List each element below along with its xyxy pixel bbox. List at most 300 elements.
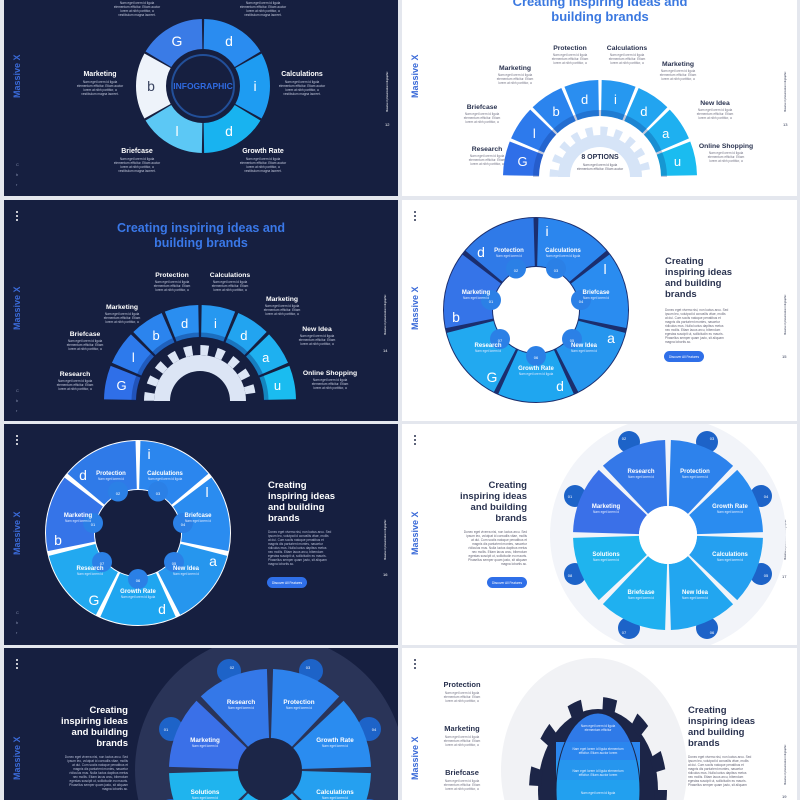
wheel chart: l (205, 484, 209, 500)
heading: and building (665, 278, 722, 289)
side letters: r (16, 630, 18, 635)
paragraph: Phasellus semper quam justo, sit aliquam (688, 783, 747, 787)
paragraph: Phasellus semper quam justo, sit aliquam (468, 558, 527, 562)
labels: elementum efficitur. Etiam (312, 382, 349, 386)
gear chart: Nam eget lorem id ligula (581, 724, 615, 728)
labels: Marketing (106, 304, 138, 311)
heading: Creating (89, 705, 128, 716)
heading: inspiring ideas (268, 491, 335, 502)
wheel chart: Nam eget lorem id (583, 296, 609, 300)
labels: vestibulum magna laoreet. (244, 13, 282, 17)
wheel chart: Marketing (64, 513, 93, 519)
labels: vestibulum magna laoreet. (118, 169, 156, 173)
wheel chart: Nam eget lorem id ligula (519, 372, 553, 376)
page number (383, 744, 388, 799)
labels: elementum efficitur. Etiam auctor (279, 84, 326, 88)
semicircle chart with gear: a (262, 350, 270, 365)
labels: Calculations (210, 272, 250, 279)
side letters: r (16, 182, 18, 187)
labels: Protection (443, 680, 481, 689)
wheel chart: 01 (489, 299, 494, 304)
page number: Massive X presentation infographic (383, 744, 387, 785)
labels: elementum efficitur. Etiam auctor (77, 84, 124, 88)
page number: 16 (383, 572, 388, 577)
semicircle chart with gear: d (240, 328, 248, 343)
labels: Nam eget lorem id ligula (445, 691, 479, 695)
title: building brands (154, 236, 248, 250)
labels: elementum efficitur. Etiam (57, 383, 94, 387)
semicircle chart with gear: i (214, 316, 217, 331)
heading: brands (665, 289, 697, 300)
heading: Creating (688, 705, 727, 716)
side letters (16, 610, 19, 635)
flower chart: Nam eget lorem id (322, 796, 348, 800)
paragraph: ridiculus mus. Nulla luctus dapibus metus (665, 324, 724, 328)
paragraph: egestas suscipit ut, sollicitudin eu mauris. (70, 779, 128, 783)
paragraph: nec mollis. Etiam lacus arcu, bibendum (73, 775, 128, 779)
labels: lorem at nibh porttitor, a (265, 312, 299, 316)
wheel chart (42, 437, 234, 629)
labels: lorem at nibh porttitor, a (300, 342, 334, 346)
title: Creating inspiring ideas and (117, 221, 285, 235)
wheel chart: 03 (554, 268, 559, 273)
labels: Nam eget lorem id ligula (709, 151, 743, 155)
paragraph: ridiculus mus. Nulla luctus dapibus metus (688, 771, 747, 775)
labels: Calculations (281, 71, 323, 78)
labels: Protection (553, 45, 587, 52)
page number: Massive X presentation infographic (783, 519, 787, 560)
wheel chart: Nam eget lorem id (185, 519, 211, 523)
page number: 17 (782, 574, 787, 579)
labels: lorem at nibh porttitor, a (213, 288, 247, 292)
labels: Nam eget lorem id ligula (445, 735, 479, 739)
panel: slide 15 wheel (light) (402, 200, 797, 421)
flower chart: 01 (164, 727, 169, 732)
labels: Nam eget lorem id ligula (213, 280, 247, 284)
labels: lorem at nibh porttitor, a (105, 320, 139, 324)
wheel chart: i (147, 446, 151, 462)
wheel chart: 06 (136, 578, 141, 583)
side letters: C (16, 610, 19, 615)
semicircle chart: b (552, 104, 560, 119)
paragraph: egestas suscipit ut, sollicitudin eu mauris. (469, 554, 527, 558)
flower chart: 05 (764, 573, 769, 578)
wheel chart: 07 (100, 561, 105, 566)
labels: vestibulum magna laoreet. (244, 169, 282, 173)
labels: Nam eget lorem id ligula (285, 80, 319, 84)
heading (460, 480, 527, 524)
labels: lorem at nibh porttitor, a (470, 162, 504, 166)
paragraph: at dui. Cum sociis natoque penatibus et (688, 763, 744, 767)
labels: lorem at nibh porttitor, a (313, 386, 347, 390)
flower chart: Nam eget lorem id (192, 796, 218, 800)
wheel chart: d (477, 244, 485, 260)
wheel chart: Calculations (545, 248, 581, 254)
labels: lorem at nibh porttitor, a (246, 9, 280, 13)
flower chart: Calculations (712, 552, 748, 558)
semicircle chart with gear: G (116, 378, 127, 393)
labels: elementum efficitur. Etiam (67, 343, 104, 347)
page number: Massive X presentation infographic (383, 519, 387, 560)
center text (577, 154, 624, 171)
labels: elementum efficitur. Etiam (444, 783, 481, 787)
button (487, 577, 527, 588)
labels: Briefcase (70, 331, 101, 338)
paragraph: Phasellus semper quam justo, sit aliquam (268, 558, 327, 562)
page number: 13 (783, 122, 788, 127)
labels: Nam eget lorem id ligula (58, 379, 92, 383)
paragraph: at dui. Cum sociis natoque penatibus et (665, 316, 721, 320)
wheel chart: Briefcase (582, 290, 610, 296)
gear chart: Nam eget lorem id ligula elementum (572, 747, 624, 751)
semicircle chart with gear: d (181, 316, 188, 331)
labels: elementum efficitur. Etiam (469, 158, 506, 162)
page number (782, 744, 787, 799)
semicircle chart with gear (104, 305, 296, 401)
wheel chart: 03 (156, 491, 161, 496)
page number (783, 72, 788, 126)
semicircle chart: u (674, 154, 681, 169)
flower chart: Nam eget lorem id (593, 558, 619, 562)
wheel chart: Research (76, 566, 104, 572)
paragraph: Phasellus semper quam justo, sit aliquam (69, 783, 128, 787)
flower chart: 07 (622, 630, 627, 635)
labels: lorem at nibh porttitor, a (553, 61, 587, 65)
labels: lorem at nibh porttitor, a (83, 88, 117, 92)
labels: Nam eget lorem id ligula (313, 378, 347, 382)
paragraph: ridiculus mus. Nulla luctus dapibus metus (70, 771, 128, 775)
page number (383, 294, 388, 352)
brand: Massive X (410, 511, 420, 555)
wheel chart: d (79, 467, 87, 483)
labels: Nam eget lorem id ligula (610, 53, 644, 57)
button: Discover All Features (272, 581, 302, 585)
page number: 14 (383, 348, 388, 353)
paragraph: magnis dis parturient montes, nascetur (73, 767, 129, 771)
paragraph: magnis dis parturient montes, nascetur (472, 542, 528, 546)
paragraph: nec mollis. Etiam lacus arcu, bibendum (665, 328, 721, 332)
wheel chart: Nam eget lorem id (173, 572, 199, 576)
labels: lorem at nibh porttitor, a (698, 116, 732, 120)
flower chart: 04 (764, 494, 769, 499)
flower chart: Marketing (592, 504, 621, 510)
heading: inspiring ideas (460, 491, 527, 502)
semicircle chart with gear: l (132, 350, 135, 365)
side letters: C (16, 388, 19, 393)
wheel chart: Calculations (147, 471, 183, 477)
paragraph: magna lobortis ac. (268, 562, 294, 566)
paragraph: ipsum leo, volutpat id convallis vitae, mollis (466, 534, 527, 538)
flower chart: Nam eget lorem id (192, 744, 218, 748)
menu dots (16, 211, 18, 221)
labels: Nam eget lorem id ligula (698, 108, 732, 112)
gear chart: efficitur. Etiam auctor lorem (579, 773, 618, 777)
heading: Creating (268, 480, 307, 491)
flower chart: Research (627, 469, 655, 475)
brand: Massive X (410, 54, 420, 98)
labels: Nam eget lorem id ligula (265, 304, 299, 308)
gear chart (501, 658, 687, 800)
labels: New Idea (302, 326, 332, 333)
labels: lorem at nibh porttitor, a (465, 120, 499, 124)
ring chart: d (225, 33, 233, 49)
semicircle chart: d (640, 104, 648, 119)
wheel chart: G (89, 592, 99, 608)
flower chart: Briefcase (627, 590, 655, 596)
labels: lorem at nibh porttitor, a (610, 61, 644, 65)
paragraph: at dui. Cum sociis natoque penatibus et (268, 538, 324, 542)
button: Discover All Features (669, 355, 699, 359)
labels: Marketing (266, 296, 298, 303)
paragraph: egestas suscipit ut, sollicitudin eu mauris. (665, 332, 724, 336)
paragraph: magna lobortis ac. (102, 787, 128, 791)
wheel chart: Protection (494, 248, 524, 254)
flower chart: 04 (372, 727, 377, 732)
panel: slide 17 flower (light) (402, 417, 797, 653)
labels: lorem at nibh porttitor, a (58, 387, 92, 391)
heading: and building (72, 727, 128, 738)
labels: elementum efficitur. Etiam (609, 57, 646, 61)
flower chart: Nam eget lorem id (286, 706, 312, 710)
labels (443, 680, 481, 791)
wheel chart: G (487, 369, 497, 385)
side letters: C (16, 162, 19, 167)
labels: Nam eget lorem id ligula (83, 80, 117, 84)
flower chart: Solutions (191, 789, 220, 796)
labels: lorem at nibh porttitor, a (445, 743, 479, 747)
wheel chart: b (452, 309, 460, 325)
wheel chart: 04 (181, 522, 186, 527)
wheel chart: d (158, 601, 166, 617)
semicircle chart with gear: u (274, 378, 281, 393)
labels: Online Shopping (699, 143, 753, 150)
labels: elementum efficitur. Etiam auctor (240, 5, 287, 9)
labels: lorem at nibh porttitor, a (709, 159, 743, 163)
title (513, 0, 687, 24)
paragraph: nec mollis. Etiam lacus arcu, bibendum (472, 550, 527, 554)
button (664, 351, 704, 362)
paragraph: ridiculus mus. Nulla luctus dapibus metus (268, 546, 327, 550)
semicircle chart: G (517, 154, 528, 169)
panel: slide 18 flower (dark) (4, 635, 405, 800)
gear chart: Nam eget lorem id ligula elementum (572, 769, 624, 773)
paragraph: magnis dis parturient montes, nascetur (665, 320, 721, 324)
panel: slide 16 wheel (dark) (4, 424, 398, 645)
heading: brands (688, 738, 720, 749)
labels: Nam eget lorem id ligula (470, 154, 504, 158)
paragraph: at dui. Cum sociis natoque penatibus et (72, 763, 128, 767)
heading (61, 705, 128, 749)
flower chart: Nam eget lorem id (682, 475, 708, 479)
flower chart: 03 (306, 665, 311, 670)
wheel chart: a (607, 330, 615, 346)
title: building brands (551, 9, 649, 24)
heading: Creating (665, 256, 704, 267)
labels: elementum efficitur. Etiam (444, 695, 481, 699)
wheel chart: Nam eget lorem id (98, 477, 124, 481)
heading: inspiring ideas (665, 267, 732, 278)
page number: 18 (383, 794, 388, 799)
labels: elementum efficitur. Etiam (104, 316, 141, 320)
paragraph: nec mollis. Etiam lacus arcu, bibendum (688, 775, 744, 779)
labels: Calculations (607, 45, 647, 52)
heading: Creating (488, 480, 527, 491)
flower chart: 01 (568, 494, 573, 499)
labels (77, 1, 326, 173)
wheel chart: d (556, 378, 564, 394)
semicircle chart: i (614, 92, 617, 107)
brand: Massive X (12, 286, 22, 330)
wheel chart: Nam eget lorem id (77, 572, 103, 576)
wheel chart: 02 (116, 491, 121, 496)
labels: vestibulum magna laoreet. (81, 92, 119, 96)
page number: Massive X presentation infographic (783, 71, 787, 112)
button (267, 577, 307, 588)
heading: inspiring ideas (688, 716, 755, 727)
labels: Nam eget lorem id ligula (445, 779, 479, 783)
panel: slide 19 gear (light) (402, 648, 797, 800)
labels: elementum efficitur. Etiam (264, 308, 301, 312)
paragraph (688, 755, 751, 787)
paragraph: ridiculus mus. Nulla luctus dapibus metus (469, 546, 527, 550)
labels: lorem at nibh porttitor, a (445, 699, 479, 703)
wheel chart: Protection (96, 471, 126, 477)
wheel chart: New Idea (571, 343, 598, 349)
heading: inspiring ideas (61, 716, 128, 727)
wheel chart: Growth Rate (120, 589, 156, 595)
labels: lorem at nibh porttitor, a (68, 347, 102, 351)
labels: Nam eget lorem id ligula (300, 334, 334, 338)
flower chart: Marketing (190, 737, 220, 744)
labels: Nam eget lorem id ligula (246, 1, 280, 5)
page number (383, 520, 388, 576)
labels: elementum efficitur. Etiam (660, 73, 697, 77)
labels: vestibulum magna laoreet. (283, 92, 321, 96)
flower chart: Nam eget lorem id (717, 558, 743, 562)
wheel chart: 06 (534, 355, 539, 360)
page number: 19 (782, 794, 787, 799)
labels: lorem at nibh porttitor, a (498, 81, 532, 85)
wheel chart: New Idea (173, 566, 200, 572)
ring chart: G (172, 33, 182, 49)
labels: Research (60, 371, 90, 378)
flower chart: Nam eget lorem id (228, 706, 254, 710)
semicircle chart with gear: b (152, 328, 160, 343)
flower chart: Solutions (592, 552, 620, 558)
labels: Marketing (499, 65, 531, 72)
wheel chart: Growth Rate (518, 366, 554, 372)
labels: elementum efficitur. Etiam (697, 112, 734, 116)
wheel chart: Marketing (462, 290, 491, 296)
wheel chart: Research (474, 343, 502, 349)
labels: Nam eget lorem id ligula (661, 69, 695, 73)
brand: Massive X (12, 511, 22, 555)
side letters: b (16, 398, 19, 403)
paragraph: egestas suscipit ut, sollicitudin eu mauris. (268, 554, 327, 558)
labels: Marketing (444, 724, 480, 733)
heading: and building (268, 502, 325, 513)
labels: elementum efficitur. Etiam auctor (114, 5, 161, 9)
paragraph: Donec eget viverra nisi, non luctus arcu. Sed (665, 308, 728, 312)
semicircle chart: a (662, 126, 670, 141)
panel: slide 13 semicircle 8 options (light) (402, 0, 797, 196)
ring chart: b (147, 78, 155, 94)
labels: Nam eget lorem id ligula (155, 280, 189, 284)
ring chart: i (253, 78, 257, 94)
paragraph: Donec eget viverra nisi, non luctus arcu. Sed (268, 530, 331, 534)
flower chart: Calculations (316, 789, 354, 796)
labels: elementum efficitur. Etiam (444, 739, 481, 743)
wheel chart: l (603, 261, 607, 277)
brand: Massive X (12, 736, 22, 780)
labels: Nam eget lorem id ligula (68, 339, 102, 343)
flower chart: New Idea (682, 590, 709, 596)
wheel chart: Briefcase (184, 513, 212, 519)
labels: elementum efficitur. Etiam (154, 284, 191, 288)
page number: Massive X presentation infographic (385, 71, 389, 112)
wheel chart: Nam eget lorem id (463, 296, 489, 300)
flower chart: Protection (283, 699, 315, 706)
center text: elementum efficitur. Etiam auctor (577, 167, 624, 171)
flower chart: Nam eget lorem id (628, 475, 654, 479)
page number: Massive X presentation infographic (783, 294, 787, 335)
labels: Nam eget lorem id ligula (105, 312, 139, 316)
labels: Briefcase (467, 104, 498, 111)
flower chart: Nam eget lorem id (682, 596, 708, 600)
labels: Briefcase (121, 148, 153, 155)
page number: 15 (782, 354, 787, 359)
labels: lorem at nibh porttitor, a (120, 165, 154, 169)
semicircle chart (503, 80, 697, 177)
heading: brands (495, 513, 527, 524)
panel: slide 14 semicircle dark (4, 200, 398, 421)
wheel chart: Nam eget lorem id ligula (121, 595, 155, 599)
gear chart: efficitur. Etiam auctor lorem (579, 751, 618, 755)
labels: elementum efficitur. Etiam (497, 77, 534, 81)
labels: Growth Rate (242, 148, 284, 155)
flower chart: Nam eget lorem id (628, 596, 654, 600)
side letters: b (16, 620, 19, 625)
labels: lorem at nibh porttitor, a (445, 787, 479, 791)
paragraph: ipsum leo, volutpat id convallis vitae, mollis (665, 312, 726, 316)
wheel chart: a (209, 553, 217, 569)
ring chart: l (175, 123, 179, 139)
side letters: b (16, 172, 19, 177)
paragraph (268, 530, 331, 566)
button: Discover All Features (492, 581, 522, 585)
labels: Briefcase (445, 768, 479, 777)
flower chart: Protection (680, 469, 710, 475)
labels: lorem at nibh porttitor, a (120, 9, 154, 13)
paragraph: Phasellus semper quam justo, sit aliquam (665, 336, 724, 340)
ring chart (136, 19, 270, 153)
flower chart: 06 (710, 630, 715, 635)
wheel chart: Nam eget lorem id (65, 519, 91, 523)
labels: lorem at nibh porttitor, a (285, 88, 319, 92)
paragraph: egestas suscipit ut, sollicitudin eu mauris. (688, 779, 747, 783)
side letters (16, 162, 19, 187)
flower chart: 02 (230, 665, 235, 670)
labels: Nam eget lorem id ligula (553, 53, 587, 57)
flower chart (550, 417, 786, 653)
labels: elementum efficitur. Etiam (212, 284, 249, 288)
wheel chart: Nam eget lorem id (475, 349, 501, 353)
wheel chart: Nam eget lorem id ligula (148, 477, 182, 481)
labels: elementum efficitur. Etiam (299, 338, 336, 342)
gear chart: Nam eget lorem id ligula (581, 791, 615, 795)
brand: Massive X (410, 736, 420, 780)
paragraph: magna lobortis ac. (665, 340, 691, 344)
